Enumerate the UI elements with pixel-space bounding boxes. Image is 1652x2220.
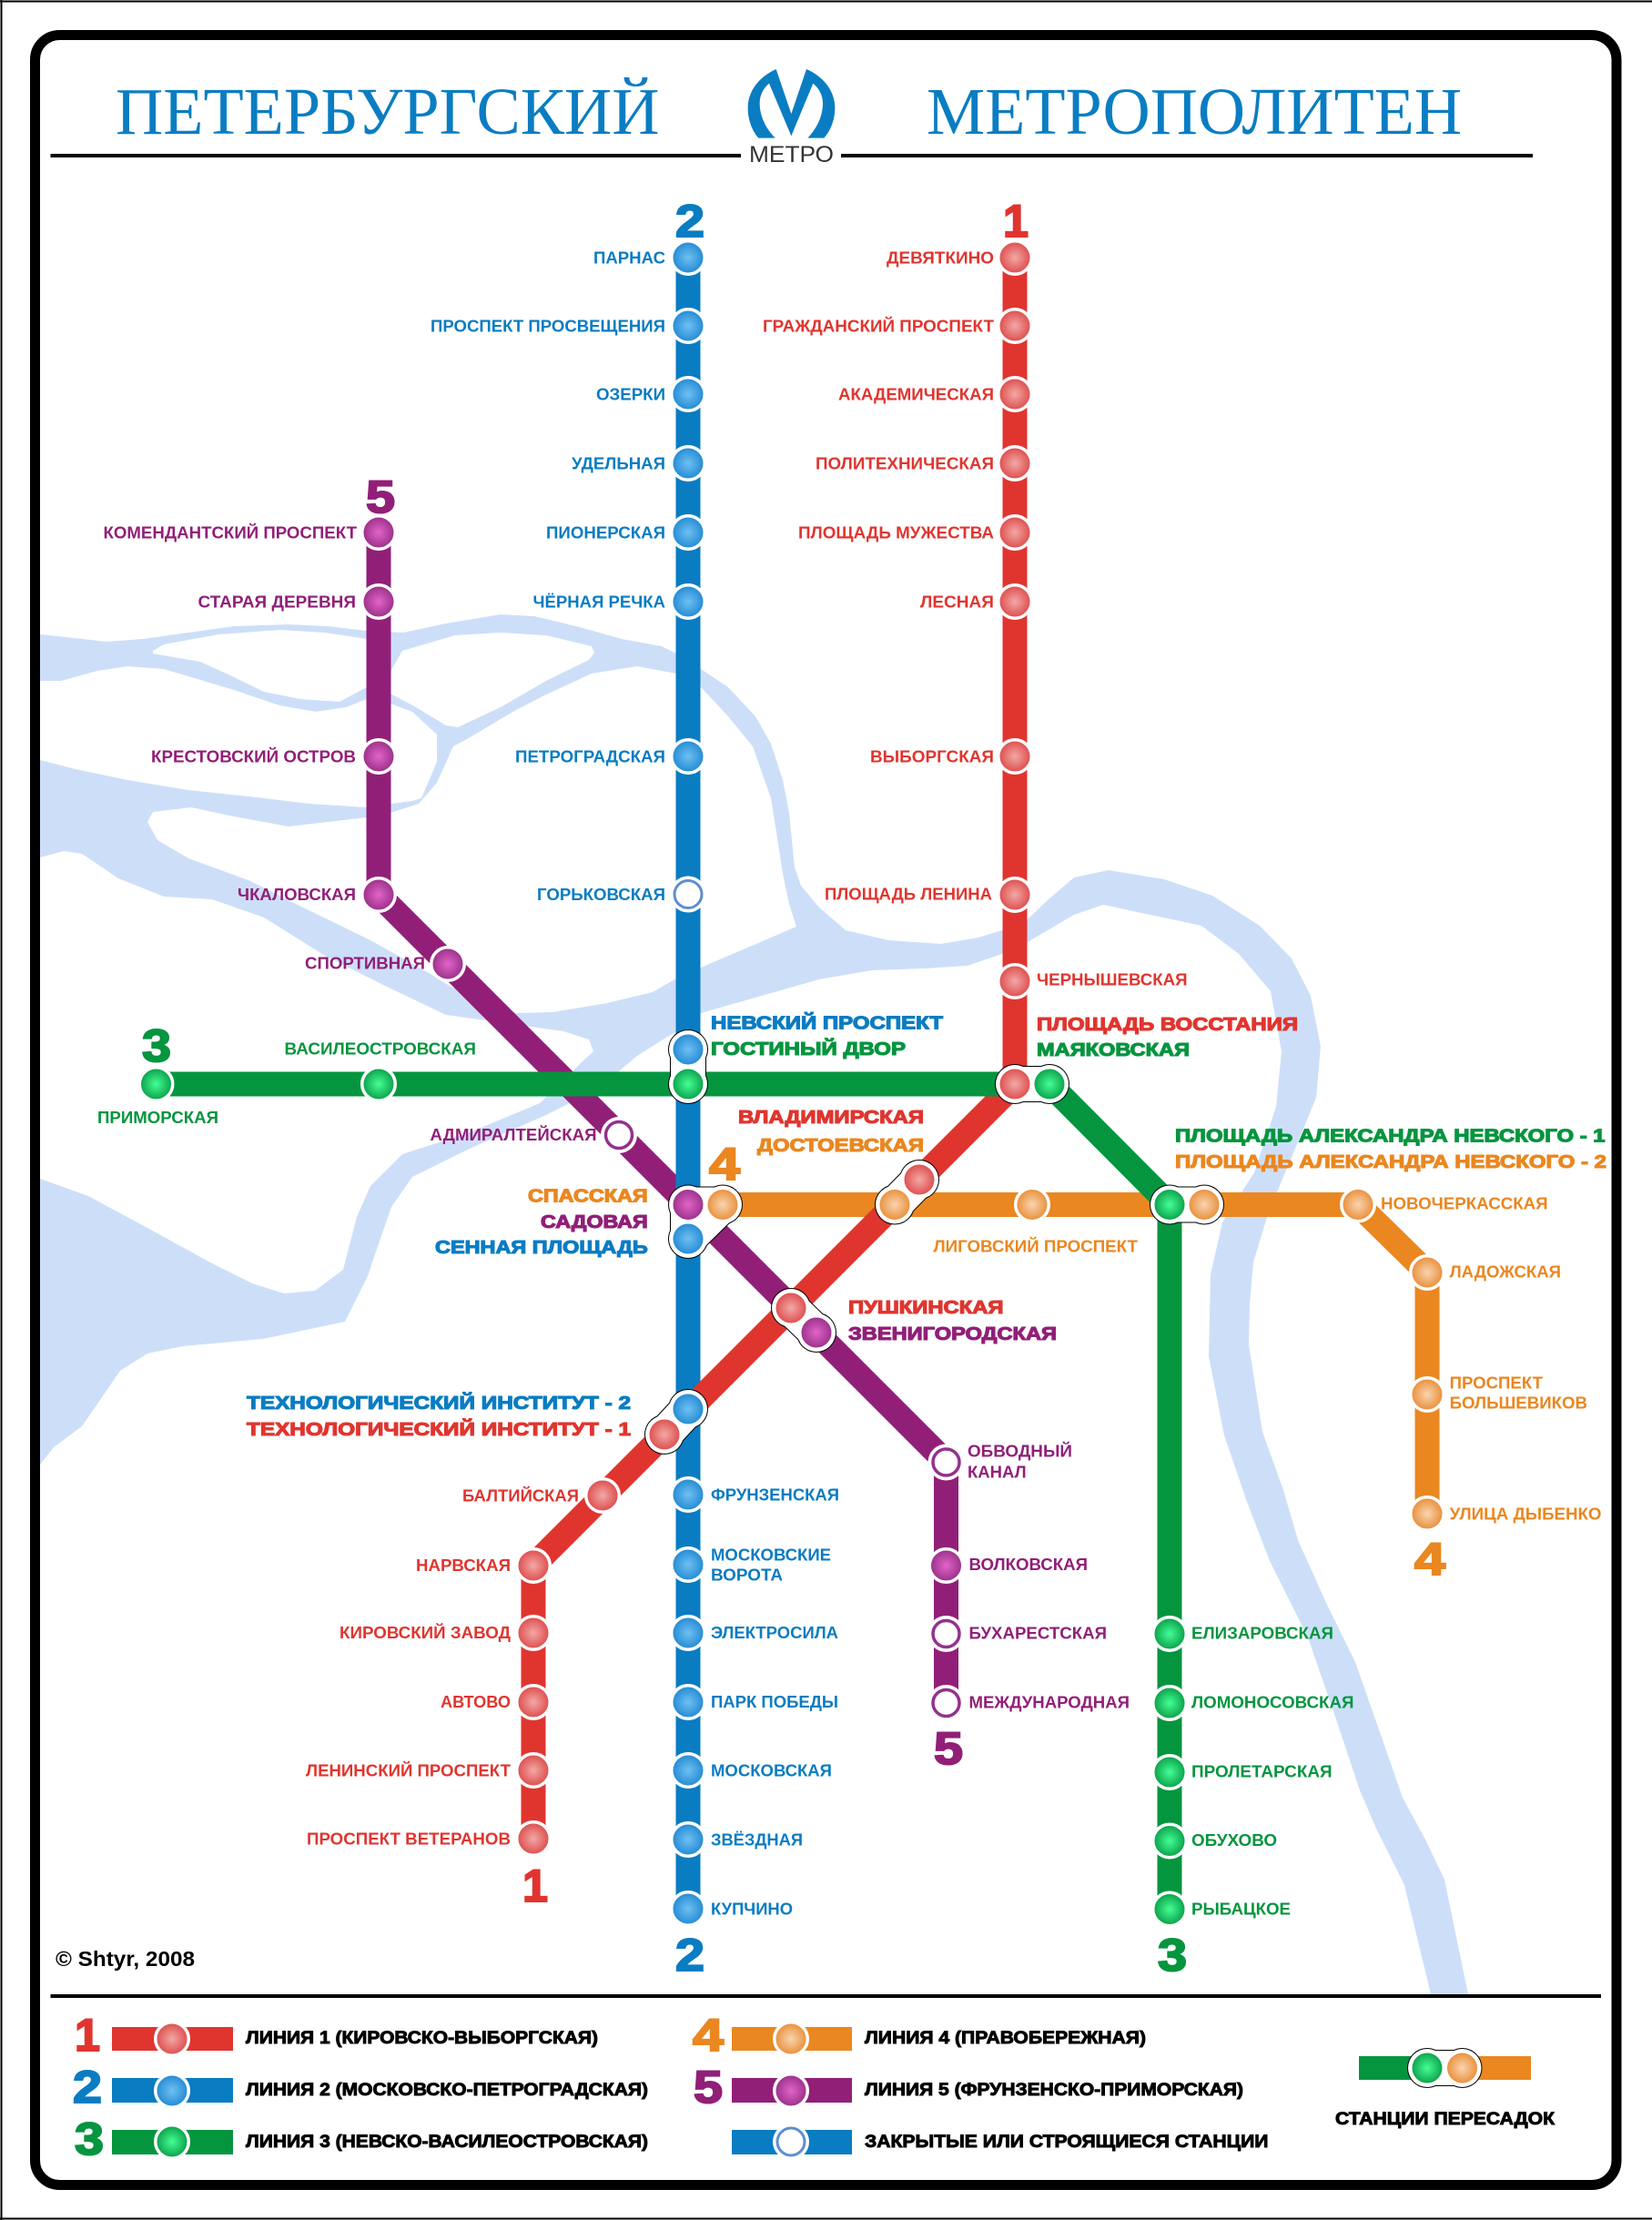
legend: line 4: 4: [693, 2010, 724, 2061]
header rule: [51, 154, 1533, 157]
station: Prosveshcheniya: [431, 309, 704, 342]
station: Ploshchad Lenina: ПЛОЩАДЬ ЛЕНИНА: [825, 885, 992, 903]
station: Admiralteyskaya (closed): [430, 1117, 637, 1153]
station: Elizarovskaya: [1153, 1617, 1333, 1650]
station: Narvskaya: НАРВСКАЯ: [416, 1556, 511, 1575]
station: Akademicheskaya: [838, 378, 1031, 411]
station: Ozerki: [596, 378, 704, 411]
interchange outlines: [644, 1029, 1224, 1455]
station: Chernyshevskaya: [998, 965, 1187, 998]
station: Primorskaya: [97, 1068, 218, 1127]
line 2 track: [675, 258, 701, 1909]
number: line 2 top: 2: [675, 196, 704, 247]
copyright: © Shtyr, 2008: [56, 1947, 195, 1971]
station: Parnas: [593, 241, 704, 274]
station: Sportivnaya: СПОРТИВНАЯ: [305, 954, 425, 972]
station: Krestovsky Ostrov: [151, 740, 395, 773]
outline: Technological Institute: [644, 1389, 708, 1455]
number: line 5 top: 5: [366, 471, 395, 522]
station: Chernaya Rechka: [533, 585, 704, 618]
legend: line 1: [75, 2010, 598, 2061]
number: line 3 bottom: 3: [1158, 1930, 1187, 1981]
number: line 2 bottom: 2: [675, 1930, 704, 1981]
station: Mayakovskaya: [1033, 1040, 1190, 1100]
station: Proletarskaya: ПРОЛЕТАРСКАЯ: [1191, 1762, 1333, 1780]
station: Moskovskie Vorota: [672, 1546, 831, 1584]
legend: line 5: [694, 2062, 1243, 2113]
station: Vasileostrovskaya: [284, 1039, 476, 1100]
station: Lomonosovskaya: ЛОМОНОСОВСКАЯ: [1191, 1693, 1354, 1711]
station: Staraya Derevnya: [198, 585, 395, 618]
station: Obvodny Kanal (closed): ОБВОДНЫЙ: [968, 1442, 1072, 1460]
station: Akademicheskaya: АКАДЕМИЧЕСКАЯ: [838, 384, 994, 404]
station: Proletarskaya: [1153, 1756, 1333, 1789]
station: Bukharestskaya (closed): БУХАРЕСТСКАЯ: [968, 1624, 1107, 1642]
station: Dostoevskaya: ДОСТОЕВСКАЯ: [757, 1136, 924, 1156]
station: Sadovaya: САДОВАЯ: [541, 1212, 648, 1232]
station: Sennaya: СЕННАЯ ПЛОЩАДЬ: [435, 1238, 648, 1258]
station: Park Pobedy: [672, 1686, 838, 1718]
metro lines: [157, 258, 1427, 1909]
station: Lesnaya: [920, 585, 1031, 618]
station: Udelnaya: [572, 447, 704, 480]
station: Sportivnaya: [305, 948, 464, 980]
station: Chkalovskaya: ЧКАЛОВСКАЯ: [238, 885, 356, 904]
station: Primorskaya: ПРИМОРСКАЯ: [97, 1108, 218, 1127]
station: Sennaya: [435, 1222, 704, 1258]
station: Komendantsky: КОМЕНДАНТСКИЙ ПРОСПЕКТ: [104, 522, 358, 542]
station: Volkovskaya: [929, 1549, 1088, 1582]
station: Moskovskie Vorota: МОСКОВСКИЕ: [711, 1546, 831, 1564]
station: Sadovaya: [541, 1188, 704, 1232]
station: Mezhdunarodnaya (closed): [928, 1685, 1130, 1721]
station: Spasskaya: [528, 1187, 739, 1222]
station: Gostiny Dvor: ГОСТИНЫЙ ДВОР: [711, 1038, 906, 1059]
legend: closed stations: ЗАКРЫТЫЕ ИЛИ СТРОЯЩИЕСЯ СТАНЦИИ: [865, 2132, 1269, 2152]
station: Parnas: ПАРНАС: [593, 248, 665, 268]
station: Kirovsky Zavod: [340, 1617, 550, 1649]
legend: line 4: [693, 2010, 1146, 2061]
station: Technological Institute 1: ТЕХНОЛОГИЧЕСКИЙ ИНСТИТУТ - 1: [247, 1418, 631, 1440]
station: Staraya Derevnya: СТАРАЯ ДЕРЕВНЯ: [198, 592, 356, 612]
station: Krestovsky Ostrov: КРЕСТОВСКИЙ ОСТРОВ: [151, 746, 356, 766]
station: Kirovsky Zavod: КИРОВСКИЙ ЗАВОД: [340, 1623, 511, 1642]
station: Pushkinskaya: ПУШКИНСКАЯ: [848, 1298, 1003, 1318]
legend: interchange stations: [1335, 2048, 1555, 2129]
legend: closed stations: [732, 2124, 1269, 2160]
station: Pushkinskaya: [775, 1292, 1003, 1324]
station: Obukhovo: ОБУХОВО: [1191, 1830, 1277, 1850]
station: Devyatkino: [887, 241, 1031, 274]
station: Prospekt Veteranov: ПРОСПЕКТ ВЕТЕРАНОВ: [307, 1830, 511, 1848]
station: Ploshchad Muzhestva: [798, 516, 1031, 549]
station: Nevsky Prospekt: НЕВСКИЙ ПРОСПЕКТ: [711, 1012, 943, 1034]
station: Vladimirskaya: [738, 1108, 936, 1196]
legend: line 1: 1: [75, 2010, 100, 2061]
station: Ploshchad Vosstaniya: [998, 1015, 1298, 1100]
station: Avtovo: АВТОВО: [441, 1692, 511, 1711]
title: left word: ПЕТЕРБУРГСКИЙ: [116, 75, 659, 148]
legend: interchange stations: СТАНЦИИ ПЕРЕСАДОК: [1335, 2109, 1555, 2129]
station: Ploshchad Vosstaniya: ПЛОЩАДЬ ВОССТАНИЯ: [1037, 1015, 1298, 1035]
legend: line 3: 3: [75, 2114, 104, 2164]
station: Chernaya Rechka: ЧЁРНАЯ РЕЧКА: [533, 592, 665, 612]
legend: line 5: ЛИНИЯ 5 (ФРУНЗЕНСКО-ПРИМОРСКАЯ): [865, 2080, 1243, 2100]
station: Elektrosila: [672, 1617, 838, 1649]
number: line 4 centre: 4: [709, 1139, 740, 1190]
station: Kupchino: КУПЧИНО: [711, 1899, 793, 1919]
legend rule: [51, 1994, 1601, 1998]
outline: Vosstaniya / Mayakovskaya: [995, 1064, 1069, 1104]
line numbers on map: [142, 196, 1445, 1981]
legend: line 2: ЛИНИЯ 2 (МОСКОВСКО-ПЕТРОГРАДСКАЯ): [246, 2080, 648, 2100]
outline: Alexander Nevsky: [1150, 1185, 1224, 1225]
icon: metro logo M: [748, 69, 835, 138]
station: Prospekt Bolshevikov: ПРОСПЕКТ: [1450, 1373, 1544, 1393]
station: Ploshchad Alexandra Nevskogo 2: [1175, 1152, 1606, 1222]
number: line 1 bottom: 1: [522, 1860, 548, 1911]
station: Frunzenskaya: [672, 1478, 839, 1511]
station: Admiralteyskaya (closed): АДМИРАЛТЕЙСКАЯ: [430, 1125, 597, 1144]
station: Petrogradskaya: ПЕТРОГРАДСКАЯ: [515, 746, 665, 766]
station: Baltiyskaya: [462, 1479, 619, 1512]
legend: line 2: [73, 2062, 648, 2113]
station: Leninsky Prospekt: ЛЕНИНСКИЙ ПРОСПЕКТ: [306, 1760, 512, 1780]
line 4 track: [723, 1205, 1427, 1514]
station: Politekhnicheskaya: [816, 447, 1031, 480]
station: Prospekt Bolshevikov: [1411, 1373, 1587, 1413]
station: Novocherkasskaya: [1342, 1188, 1548, 1222]
station: Zvenigorodskaya: ЗВЕНИГОРОДСКАЯ: [848, 1324, 1057, 1344]
station: Narvskaya: [416, 1549, 550, 1582]
station: Ploshchad Alexandra Nevskogo 2: ПЛОЩАДЬ АЛЕКСАНДРА НЕВСКОГО - 2: [1175, 1152, 1606, 1172]
station: Ulitsa Dybenko: УЛИЦА ДЫБЕНКО: [1450, 1504, 1602, 1524]
station: Lesnaya: ЛЕСНАЯ: [920, 592, 994, 612]
line 5 track: [379, 532, 947, 1703]
water: rivers and gulf: [40, 614, 1468, 1994]
station: Moskovskie Vorota: ВОРОТА: [711, 1566, 783, 1584]
outline: Pushkinskaya / Zvenigorodskaya: [771, 1288, 836, 1353]
line 3 track: [157, 1084, 1170, 1909]
outline: Vladimirskaya / Dostoevskaya: [875, 1160, 939, 1225]
panel: legend: [73, 2010, 1555, 2164]
station: Mezhdunarodnaya (closed): МЕЖДУНАРОДНАЯ: [968, 1693, 1130, 1711]
station: Zvenigorodskaya: [800, 1316, 1057, 1349]
line 3 stations: [97, 1038, 1606, 1926]
legend: line 3: ЛИНИЯ 3 (НЕВСКО-ВАСИЛЕОСТРОВСКАЯ): [246, 2132, 648, 2152]
station: Elizarovskaya: ЕЛИЗАРОВСКАЯ: [1191, 1624, 1333, 1642]
station: Elektrosila: ЭЛЕКТРОСИЛА: [711, 1623, 838, 1642]
station: Park Pobedy: ПАРК ПОБЕДЫ: [711, 1692, 838, 1711]
station: Ligovsky Prospekt: [934, 1188, 1139, 1256]
legend: line 1: ЛИНИЯ 1 (КИРОВСКО-ВЫБОРГСКАЯ): [246, 2028, 598, 2048]
station: Spasskaya: СПАССКАЯ: [528, 1187, 648, 1207]
station: Kupchino: [672, 1892, 793, 1925]
station: Vyborgskaya: [870, 740, 1031, 773]
station: Technological Institute 2: ТЕХНОЛОГИЧЕСКИЙ ИНСТИТУТ - 2: [247, 1392, 631, 1414]
legend: line 3: [75, 2114, 648, 2164]
station: Ploshchad Alexandra Nevskogo 1: [1153, 1127, 1606, 1222]
station: Prospekt Bolshevikov: БОЛЬШЕВИКОВ: [1450, 1393, 1587, 1413]
logo caption: МЕТРО: [749, 142, 834, 167]
station: Komendantsky: [104, 516, 395, 549]
station: Gorkovskaya (closed): [537, 876, 706, 912]
station: Grazhdansky: ГРАЖДАНСКИЙ ПРОСПЕКТ: [763, 317, 995, 335]
station: Chkalovskaya: [238, 878, 395, 911]
station: Prospekt Veteranov: [307, 1822, 550, 1855]
station: Gostiny Dvor: [672, 1038, 906, 1100]
title: right word: МЕТРОПОЛИТЕН: [927, 75, 1462, 148]
station: Mayakovskaya: МАЯКОВСКАЯ: [1037, 1040, 1190, 1060]
station: Technological Institute 2: [247, 1392, 704, 1425]
station: Leninsky Prospekt: [306, 1754, 550, 1787]
station: Ligovsky Prospekt: ЛИГОВСКИЙ ПРОСПЕКТ: [934, 1236, 1139, 1256]
line 4 stations: [528, 1136, 1606, 1530]
station: Pionerskaya: ПИОНЕРСКАЯ: [546, 522, 665, 542]
station: Vladimirskaya: ВЛАДИМИРСКАЯ: [738, 1108, 924, 1128]
legend: line 2: 2: [73, 2062, 102, 2113]
number: line 1 top: 1: [1003, 196, 1029, 247]
station: Ploshchad Alexandra Nevskogo 1: ПЛОЩАДЬ АЛЕКСАНДРА НЕВСКОГО - 1: [1175, 1127, 1606, 1147]
station: Vyborgskaya: ВЫБОРГСКАЯ: [870, 746, 994, 766]
station: Novocherkasskaya: НОВОЧЕРКАССКАЯ: [1381, 1194, 1548, 1212]
station: Prosveshcheniya: ПРОСПЕКТ ПРОСВЕЩЕНИЯ: [431, 317, 665, 335]
legend: line 5: 5: [694, 2062, 723, 2113]
station: Devyatkino: ДЕВЯТКИНО: [887, 248, 994, 268]
station: Vasileostrovskaya: ВАСИЛЕОСТРОВСКАЯ: [284, 1039, 476, 1058]
station: Volkovskaya: ВОЛКОВСКАЯ: [968, 1555, 1088, 1574]
station: Gorkovskaya (closed): ГОРЬКОВСКАЯ: [537, 885, 665, 904]
number: line 4 bottom: 4: [1414, 1534, 1445, 1585]
station: Obvodny Kanal (closed): [928, 1442, 1072, 1482]
outline: Nevsky / Gostiny: [668, 1029, 708, 1104]
station: Baltiyskaya: БАЛТИЙСКАЯ: [462, 1485, 579, 1505]
station: Rybatskoe: [1153, 1892, 1291, 1926]
station: Ladozhskaya: [1411, 1256, 1561, 1289]
station: Technological Institute 1: [247, 1418, 681, 1451]
station: Ozerki: ОЗЕРКИ: [596, 384, 665, 404]
legend: line 4: ЛИНИЯ 4 (ПРАВОБЕРЕЖНАЯ): [865, 2028, 1146, 2048]
station: Zvezdnaya: [672, 1823, 803, 1856]
station: Udelnaya: УДЕЛЬНАЯ: [572, 453, 665, 473]
station: Ulitsa Dybenko: [1411, 1497, 1602, 1530]
number: line 3 west: 3: [142, 1020, 171, 1071]
station: Nevsky Prospekt: [672, 1012, 943, 1066]
outline: Sadovaya / Spasskaya / Sennaya: [668, 1185, 743, 1259]
line 1 track: [533, 258, 1015, 1839]
station: Petrogradskaya: [515, 740, 704, 773]
station: Dostoevskaya: [757, 1136, 924, 1222]
station: Avtovo: [441, 1686, 550, 1718]
station: Ploshchad Muzhestva: ПЛОЩАДЬ МУЖЕСТВА: [798, 522, 994, 542]
line 1 stations: [247, 241, 1298, 1855]
station: Obvodny Kanal (closed): КАНАЛ: [968, 1462, 1027, 1482]
station: Lomonosovskaya: [1153, 1687, 1354, 1719]
number: line 5 bottom: 5: [934, 1723, 963, 1774]
station: Pionerskaya: [546, 516, 704, 549]
station: Ploshchad Lenina: [825, 878, 1031, 911]
station: Ladozhskaya: ЛАДОЖСКАЯ: [1450, 1262, 1561, 1282]
station: Frunzenskaya: ФРУНЗЕНСКАЯ: [711, 1485, 839, 1504]
station: Grazhdansky: [763, 309, 1031, 342]
station: Zvezdnaya: ЗВЁЗДНАЯ: [711, 1830, 803, 1850]
station: Rybatskoe: РЫБАЦКОЕ: [1191, 1899, 1291, 1919]
station: Moskovskaya: МОСКОВСКАЯ: [711, 1760, 832, 1780]
station: Politekhnicheskaya: ПОЛИТЕХНИЧЕСКАЯ: [816, 453, 994, 473]
line 5 stations: [104, 516, 1130, 1721]
station: Chernyshevskaya: ЧЕРНЫШЕВСКАЯ: [1037, 970, 1187, 988]
station: Moskovskaya: [672, 1754, 832, 1787]
station: Bukharestskaya (closed): [928, 1616, 1107, 1652]
line 2 stations: [247, 241, 943, 1925]
station: Obukhovo: [1153, 1824, 1277, 1858]
